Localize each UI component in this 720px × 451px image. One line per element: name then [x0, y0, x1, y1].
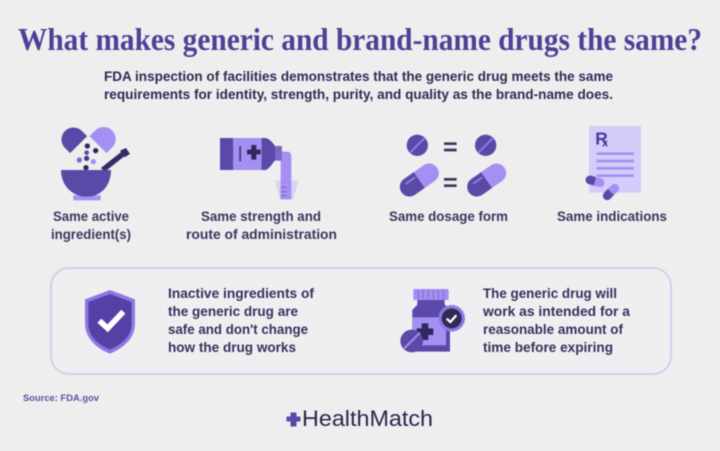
text: generic drug duration	[482, 286, 631, 355]
label	[186, 209, 337, 242]
icon: prescription sheet with capsules: R	[595, 129, 608, 149]
label: Same active	[53, 209, 129, 224]
icon: bottle pouring into measuring cup	[220, 138, 298, 199]
label: ingredient(s)	[51, 227, 131, 242]
text: inactive ingredients: safe and don't change	[168, 322, 308, 337]
item: same dosage form	[389, 135, 510, 224]
item: same indications	[557, 126, 667, 224]
source: Source: FDA.gov	[23, 393, 100, 404]
intro text: requirements for identity, strength, purity, and quality as the brand-name does.	[104, 86, 613, 102]
text: inactive ingredients	[168, 286, 315, 355]
label	[51, 209, 131, 242]
icon: prescription sheet with capsules	[585, 126, 641, 202]
icon: matching tablets and capsules	[396, 135, 510, 200]
panel: additional similarities	[51, 268, 671, 374]
text: generic drug duration: time before expiring	[483, 340, 613, 355]
text: generic drug duration: The generic drug will	[483, 286, 617, 301]
label: Same dosage form	[389, 209, 508, 224]
panel outline	[51, 268, 671, 374]
text: generic drug duration: work as intended for a	[482, 304, 631, 319]
intro text	[104, 68, 613, 102]
text: inactive ingredients: Inactive ingredients of	[168, 286, 315, 301]
text: inactive ingredients: how the drug works	[168, 340, 296, 355]
wordmark: HealthMatch	[302, 406, 433, 431]
label: route of administration	[186, 227, 337, 242]
logo: HealthMatch	[287, 406, 433, 431]
icon: shield with check mark	[85, 290, 135, 354]
item: same strength and route	[186, 138, 337, 242]
icon: medicine bottle with badge	[400, 289, 465, 352]
icon: mortar, pestle and capsule	[57, 122, 130, 200]
icon: prescription sheet with capsules: x	[602, 138, 608, 150]
intro text: FDA inspection of facilities demonstrates that the generic drug meets the same	[104, 68, 613, 84]
text: generic drug duration: reasonable amount of	[483, 322, 623, 337]
label: Same indications	[557, 209, 667, 224]
icon: logo cross	[287, 413, 300, 426]
item: same active ingredients	[51, 122, 131, 242]
text: inactive ingredients: the generic drug are	[168, 304, 298, 319]
label: Same strength and	[201, 209, 321, 224]
